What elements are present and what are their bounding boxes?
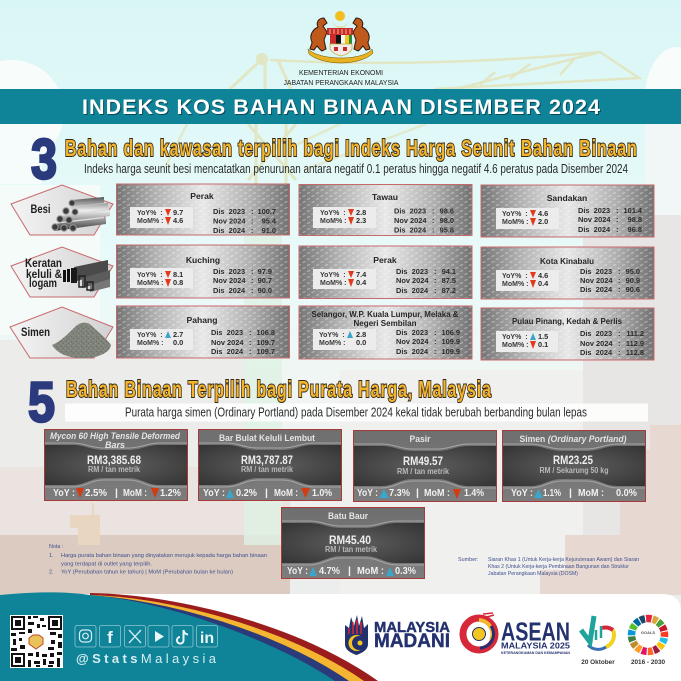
panel: Perak (Keratan): : (434, 276, 436, 285)
right tiger (353, 18, 370, 51)
price card: Simen (Ordinary Portland): RM23.25 (553, 455, 594, 467)
price card: Simen (Ordinary Portland): YoY : (511, 487, 533, 499)
panel: Pulau Pinang, Kedah & Perlis (Simen): Pulau Pinang, Kedah & Perlis (512, 316, 622, 326)
panel: Kota Kinabalu (Keratan): 4.6 (538, 271, 548, 280)
panel: Perak (Besi): : (251, 207, 253, 216)
panel: Sandakan (Besi): : (616, 215, 618, 224)
source (458, 557, 639, 577)
panel: Sandakan (Besi): Nov 2024 (578, 215, 611, 224)
panel: Pulau Pinang, Kedah & Perlis (Simen): : (618, 348, 620, 357)
panel: Kota Kinabalu (Keratan): 90.9 (626, 276, 640, 285)
panel: Tawau (Besi): 95.8 (440, 226, 454, 234)
panel: Pahang (Simen): Pahang (186, 315, 218, 325)
price card: Mycon 60: YoY : (53, 487, 75, 499)
icon: QR crest (29, 635, 43, 649)
price card: Bar Bulat Keluli Lembut: RM / tan metrik (241, 465, 293, 474)
ministry name: JABATAN PERANGKAAN MALAYSIA (284, 78, 399, 87)
panel: Perak (Keratan): MoM% : (320, 280, 346, 287)
icon: x (129, 630, 141, 643)
category: Keratan keluli & logam: Keratan (25, 256, 62, 270)
panel: Sandakan (Besi): : (616, 225, 618, 234)
panel: Sandakan (Besi): MoM% : (502, 219, 528, 226)
price card: Mycon 60: 1.2% (160, 487, 182, 499)
panel: Perak (Keratan): Dis 2023 (396, 267, 428, 276)
panel: Kuching (Keratan): 8.1 (173, 270, 183, 279)
panel: Pulau Pinang, Kedah & Perlis (Simen): 112.9 (626, 339, 644, 348)
panel: Pahang (Simen): : (249, 338, 251, 347)
panel: Selangor, W.P. Kuala Lumpur, Melaka & Negeri Sembilan (Simen): MoM% : (319, 340, 345, 347)
panel: Selangor, W.P. Kuala Lumpur, Melaka & Negeri Sembilan (Simen): : (434, 328, 436, 337)
left tiger (310, 18, 327, 51)
panel: Tawau (Besi): Dis 2024 (394, 226, 427, 234)
panel: Tawau (Besi): YoY% : (320, 210, 346, 217)
panel: Kota Kinabalu (Keratan): Kota Kinabalu (540, 256, 594, 266)
panel: Pahang (Simen): 106.8 (256, 328, 275, 337)
notes: 1. (49, 553, 54, 559)
logo: coat of arms (308, 11, 373, 63)
logo: ASEAN Malaysia 2025: ASEAN (501, 616, 570, 646)
panel: Pahang (Simen): Dis 2024 (211, 347, 244, 356)
panel: Kota Kinabalu (Keratan): YoY% : (502, 273, 528, 280)
logo: SDG wheel (630, 617, 666, 666)
panel: Selangor, W.P. Kuala Lumpur, Melaka & Negeri Sembilan (Simen): 2.8 (356, 330, 366, 339)
panel: Sandakan (Besi): 101.4 (624, 206, 643, 215)
panel: Pulau Pinang, Kedah & Perlis (Simen): : (618, 329, 620, 338)
notes: 2. (49, 570, 54, 576)
price card: Simen (Ordinary Portland): Simen (Ordinary Portland) (520, 434, 626, 444)
panel: Pahang (Simen): 109.7 (256, 347, 275, 356)
price card: Pasir: 1.4% (464, 487, 485, 499)
notes: YoY (Perubahan tahun ke tahun) | MoM (Perubahan bulan ke bulan) (61, 570, 233, 576)
panel: Selangor, W.P. Kuala Lumpur, Melaka & Negeri Sembilan (Simen): 109.9 (442, 347, 460, 356)
logo: ASEAN Malaysia 2025: KETERANGKUMAN DAN KEMAMPANAN (501, 651, 570, 655)
social letters (107, 628, 214, 647)
panel: Tawau (Besi) (299, 184, 472, 236)
social icons (75, 626, 218, 647)
price card: Bar Bulat Keluli Lembut: MoM : (274, 487, 298, 499)
panel: Sandakan (Besi): : (616, 206, 618, 215)
category: Besi (11, 185, 113, 235)
price card: Batu Baur: Batu Baur (328, 511, 368, 521)
price card: Mycon 60: Mycon 60 High Tensile Deformed (50, 431, 180, 441)
panel: Pulau Pinang, Kedah & Perlis (Simen): YoY% : (502, 334, 528, 341)
price card: Mycon 60: Bars (105, 440, 125, 450)
handle: @StatsMalaysia: @Stats Malaysia (76, 651, 217, 666)
panel: Sandakan (Besi): 4.6 (538, 209, 548, 218)
ministry name (284, 68, 399, 87)
logo: ASEAN Malaysia 2025: MALAYSIA 2025 (501, 640, 570, 650)
category: Keratan keluli & logam (11, 247, 113, 297)
QR code (10, 615, 63, 668)
panel: Kuching (Keratan): Kuching (186, 255, 220, 265)
price card: Simen (Ordinary Portland) (502, 430, 646, 502)
price card: Mycon 60 (44, 430, 188, 500)
panel: Kuching (Keratan) (116, 245, 290, 298)
panel: Perak (Keratan): 0.4 (356, 278, 367, 287)
panel: Pulau Pinang, Kedah & Perlis (Simen): 111.2 (626, 329, 644, 338)
panel: Sandakan (Besi): Dis 2023 (578, 206, 610, 215)
panel: Pahang (Simen): Dis 2023 (211, 328, 243, 337)
price card: Simen (Ordinary Portland): MoM : (578, 487, 604, 499)
panel: Kuching (Keratan): 97.9 (258, 267, 272, 276)
notes: Nota : (49, 544, 63, 550)
panel: Perak (Keratan) (299, 246, 472, 298)
price card: Simen (Ordinary Portland): 1.1% (543, 487, 561, 499)
panel: Sandakan (Besi): 2.0 (538, 217, 548, 226)
panel: Selangor, W.P. Kuala Lumpur, Melaka & Negeri Sembilan (Simen): : (434, 337, 436, 346)
panel: Kuching (Keratan): : (251, 276, 253, 285)
panel: Kuching (Keratan): Dis 2024 (213, 286, 246, 295)
panel: Kota Kinabalu (Keratan): 95.0 (626, 267, 640, 276)
notes (49, 544, 267, 576)
category: Besi: Besi (30, 202, 50, 216)
panel: Selangor, W.P. Kuala Lumpur, Melaka & Negeri Sembilan (Simen): Negeri Sembilan (354, 318, 416, 328)
panel: Sandakan (Besi): Dis 2024 (578, 225, 611, 234)
panel: Perak (Besi) (116, 184, 290, 235)
logo: SDG wheel: GOALS (641, 630, 655, 635)
panel: Perak (Keratan): 87.2 (442, 286, 456, 295)
panel: Perak (Besi): 9.7 (173, 208, 183, 217)
section 3 heading: Bahan dan kawasan terpilih bagi Indeks Harga Seunit Bahan Binaan (65, 136, 637, 162)
panel: Pahang (Simen): 2.7 (173, 330, 183, 339)
price card: Pasir: RM49.57 (403, 456, 443, 468)
panel: Kota Kinabalu (Keratan): 0.4 (538, 279, 549, 288)
panel: Kuching (Keratan): YoY% : (137, 272, 163, 279)
panel: Perak (Besi): Dis 2023 (213, 207, 245, 216)
panel: Tawau (Besi): Nov 2024 (394, 216, 427, 225)
panel: Perak (Keratan): Nov 2024 (396, 276, 429, 285)
panel: Selangor, W.P. Kuala Lumpur, Melaka & Negeri Sembilan (Simen): 0.0 (356, 338, 366, 347)
logo: 20 Oktober statistics day: 20 Oktober (581, 659, 615, 666)
price card: Pasir: RM / tan metrik (397, 467, 449, 476)
panel: Sandakan (Besi): 96.8 (628, 225, 642, 234)
price card: Bar Bulat Keluli Lembut: Bar Bulat Keluli Lembut (219, 433, 315, 443)
panel: Pulau Pinang, Kedah & Perlis (Simen): 1.5 (538, 332, 548, 341)
title band (0, 89, 681, 124)
panel: Selangor, W.P. Kuala Lumpur, Melaka & Negeri Sembilan (Simen): Nov 2024 (396, 337, 429, 346)
section 5 heading: Bahan Binaan Terpilih bagi Purata Harga, Malaysia (66, 377, 492, 403)
panel: Sandakan (Besi) (481, 185, 654, 237)
panel: Sandakan (Besi): YoY% : (502, 211, 528, 218)
panel: Kuching (Keratan): : (251, 267, 253, 276)
price card: Pasir (354, 430, 496, 502)
panel: Selangor, W.P. Kuala Lumpur, Melaka & Negeri Sembilan (Simen): 109.9 (442, 337, 460, 346)
source: Jabatan Perangkaan Malaysia (DOSM) (488, 571, 578, 577)
logo: ASEAN Malaysia 2025 (463, 613, 570, 655)
panel: Tawau (Besi): MoM% : (320, 218, 346, 225)
title band: INDEKS KOS BAHAN BINAAN DISEMBER 2024 (82, 95, 600, 119)
panel: Kota Kinabalu (Keratan): : (618, 285, 620, 294)
notes: yang terdapat di outlet yang terpilih. (61, 562, 152, 568)
panel: Tawau (Besi): 2.3 (356, 216, 366, 225)
panel: Perak (Besi): 95.4 (262, 216, 277, 226)
panel: Pulau Pinang, Kedah & Perlis (Simen) (481, 308, 654, 360)
panel: Kota Kinabalu (Keratan): Dis 2023 (580, 267, 612, 276)
panel: Perak (Besi): 4.6 (173, 216, 183, 225)
source: Sumber: (458, 557, 478, 563)
icon: steel pipes (52, 197, 110, 231)
section 5 number: 5 (28, 370, 55, 434)
panel: Pahang (Simen): YoY% : (137, 332, 163, 339)
panel: Perak (Besi): : (251, 226, 253, 235)
logo: Malaysia Madani: MALAYSIA (374, 620, 451, 636)
panel: Perak (Keratan): Dis 2024 (396, 286, 429, 295)
panel: Tawau (Besi): : (432, 206, 434, 216)
panel: Sandakan (Besi): 98.8 (628, 215, 642, 224)
category: Simen: Simen (21, 325, 50, 339)
panel: Perak (Besi): Nov 2024 (213, 216, 246, 226)
panel: Pulau Pinang, Kedah & Perlis (Simen): 112.8 (626, 348, 644, 357)
panel: Pahang (Simen): MoM% : (137, 340, 163, 347)
panel: Kota Kinabalu (Keratan): Dis 2024 (580, 285, 613, 294)
social letters: f (107, 628, 113, 647)
panel: Kota Kinabalu (Keratan) (481, 247, 654, 299)
social letters: in (200, 630, 214, 647)
category: Keratan keluli & logam: keluli & (26, 267, 62, 281)
price card: Bar Bulat Keluli Lembut (198, 430, 342, 500)
panel: Pahang (Simen): 0.0 (173, 338, 183, 347)
price card: Batu Baur: | (348, 565, 351, 577)
price card: Batu Baur: RM / tan metrik (325, 545, 377, 554)
panel: Perak (Keratan): 87.5 (442, 276, 456, 285)
panel: Kota Kinabalu (Keratan): : (618, 276, 620, 285)
price card: Mycon 60: MoM : (123, 487, 147, 499)
panel: Kota Kinabalu (Keratan): Nov 2024 (580, 276, 613, 285)
price card: Bar Bulat Keluli Lembut: | (265, 487, 268, 499)
price card: Bar Bulat Keluli Lembut: RM3,787.87 (241, 455, 293, 467)
panel: Pahang (Simen): Nov 2024 (211, 338, 244, 347)
panel: Kuching (Keratan): Nov 2024 (213, 276, 246, 285)
panel: Perak (Besi): Perak (190, 191, 214, 201)
icon: play (155, 631, 164, 642)
icon: instagram (80, 630, 92, 642)
icon: tiktok (177, 630, 188, 644)
logo: Malaysia Madani: MADANI (374, 631, 450, 652)
ministry name: KEMENTERIAN EKONOMI (299, 68, 383, 77)
panel: Kuching (Keratan): 0.8 (173, 278, 183, 287)
panel: Tawau (Besi): Tawau (372, 192, 398, 202)
panel: Selangor, W.P. Kuala Lumpur, Melaka & Negeri Sembilan (Simen): Dis 2023 (396, 328, 428, 337)
panel: Tawau (Besi): : (432, 226, 434, 234)
panel: Pahang (Simen): 109.7 (256, 338, 275, 347)
panel: Kuching (Keratan): Dis 2023 (213, 267, 245, 276)
section 3 number: 3 (31, 128, 57, 192)
panel: Perak (Besi): : (251, 216, 253, 226)
panel: Perak (Besi): Dis 2024 (213, 226, 246, 235)
notes: Harga purata bahan binaan yang dinyatakan merujuk kepada harga bahan binaan (61, 553, 267, 559)
panel: Tawau (Besi): : (432, 216, 434, 225)
price card: Simen (Ordinary Portland): | (569, 487, 572, 499)
price card: Batu Baur (282, 508, 424, 578)
panel: Pahang (Simen): : (249, 328, 251, 337)
panel: Selangor, W.P. Kuala Lumpur, Melaka & Negeri Sembilan (Simen): : (434, 347, 436, 356)
panel: Kuching (Keratan): MoM% : (137, 280, 163, 287)
panel: Tawau (Besi): 2.8 (356, 208, 366, 217)
price card: Batu Baur: YoY : (287, 565, 308, 577)
panel: Sandakan (Besi): Sandakan (547, 193, 587, 203)
price card: Pasir: 7.3% (389, 487, 411, 499)
logo: 20 Oktober statistics day (581, 616, 615, 666)
section 5 subtitle (65, 404, 648, 422)
panel: Pulau Pinang, Kedah & Perlis (Simen): Dis 2023 (580, 329, 612, 338)
panel: Tawau (Besi): Dis 2023 (394, 206, 426, 216)
price card: Pasir: YoY : (357, 487, 378, 499)
price card: Mycon 60: 2.5% (85, 487, 108, 499)
source: Khas 2 (Untuk Kerja-kerja Pembinaan Bangunan dan Struktur (488, 564, 629, 570)
price card: Pasir: MoM : (424, 487, 450, 499)
category: Keratan keluli & logam: logam (29, 276, 57, 290)
panel: Tawau (Besi): 98.6 (440, 206, 454, 216)
price card: Pasir: | (416, 487, 419, 499)
panel: Selangor, W.P. Kuala Lumpur, Melaka & Negeri Sembilan (Simen): YoY% : (319, 332, 345, 339)
logo: Malaysia Madani (345, 615, 451, 655)
price card: Batu Baur: 0.3% (395, 565, 417, 577)
price card: Batu Baur: 4.7% (319, 565, 341, 577)
panel: Pulau Pinang, Kedah & Perlis (Simen): 0.1 (538, 340, 548, 349)
panel: Perak (Keratan): YoY% : (320, 272, 346, 279)
source: Siaran Khas 1 (Untuk Kerja-kerja Kejuruteraan Awam) dan Siaran (488, 557, 639, 563)
panel: Perak (Besi): 100.7 (258, 207, 276, 216)
price card: Bar Bulat Keluli Lembut: 0.2% (236, 487, 258, 499)
panel: Pulau Pinang, Kedah & Perlis (Simen): Nov 2024 (580, 339, 613, 348)
panel: Kota Kinabalu (Keratan): MoM% : (502, 281, 528, 288)
panel: Kota Kinabalu (Keratan): : (618, 267, 620, 276)
panel: Kuching (Keratan): 90.0 (258, 286, 272, 295)
panel: Selangor, W.P. Kuala Lumpur, Melaka & Negeri Sembilan (Simen): Dis 2024 (396, 347, 429, 356)
panel: Kota Kinabalu (Keratan): 90.6 (626, 285, 640, 294)
icon: hollow steel sections (63, 260, 110, 292)
panel: Perak (Keratan): : (434, 267, 436, 276)
price card: Bar Bulat Keluli Lembut: YoY : (203, 487, 225, 499)
price card: Simen (Ordinary Portland): RM / Sekarung 50 kg (540, 466, 609, 475)
panel: Selangor, W.P. Kuala Lumpur, Melaka & Negeri Sembilan (Simen): Selangor, W.P. Kuala Lumpur, Melaka & (312, 309, 458, 319)
price card: Mycon 60: RM3,385.68 (87, 455, 142, 467)
panel: Selangor, W.P. Kuala Lumpur, Melaka & Negeri Sembilan (Simen) (299, 306, 472, 359)
price card: Simen (Ordinary Portland): 0.0% (616, 487, 638, 499)
panel: Perak (Besi): 91.0 (262, 226, 276, 235)
panel: Tawau (Besi): 98.0 (440, 216, 454, 225)
panel: Pulau Pinang, Kedah & Perlis (Simen): MoM% : (502, 342, 528, 349)
panel: Kuching (Keratan): 90.7 (258, 276, 272, 285)
price card: Bar Bulat Keluli Lembut: 1.0% (312, 487, 333, 499)
category: Simen (10, 307, 113, 358)
panel: Perak (Keratan): 7.4 (356, 270, 367, 279)
panel: Pulau Pinang, Kedah & Perlis (Simen): : (618, 339, 620, 348)
logo: SDG wheel: 2016 - 2030 (631, 659, 665, 666)
icon: cement pile (52, 323, 111, 358)
panel: Perak (Keratan): 94.1 (442, 267, 456, 276)
price card: Mycon 60: RM / tan metrik (88, 465, 140, 474)
panel: Pulau Pinang, Kedah & Perlis (Simen): Dis 2024 (580, 348, 613, 357)
panel: Perak (Keratan): Perak (373, 255, 397, 265)
panel: Perak (Besi): MoM% : (137, 218, 163, 225)
panel: Perak (Keratan): : (434, 286, 436, 295)
price card: Batu Baur: RM45.40 (329, 535, 371, 547)
panel: Kuching (Keratan): : (251, 286, 253, 295)
price card: Pasir: Pasir (410, 434, 431, 444)
price card: Batu Baur: MoM : (357, 565, 384, 577)
panel: Selangor, W.P. Kuala Lumpur, Melaka & Negeri Sembilan (Simen): 106.9 (442, 328, 460, 337)
panel: Pahang (Simen): : (249, 347, 251, 356)
panel: Perak (Besi): YoY% : (137, 210, 163, 217)
footer (0, 592, 681, 681)
price card: Mycon 60: | (115, 487, 118, 499)
panel: Pahang (Simen) (116, 306, 290, 358)
